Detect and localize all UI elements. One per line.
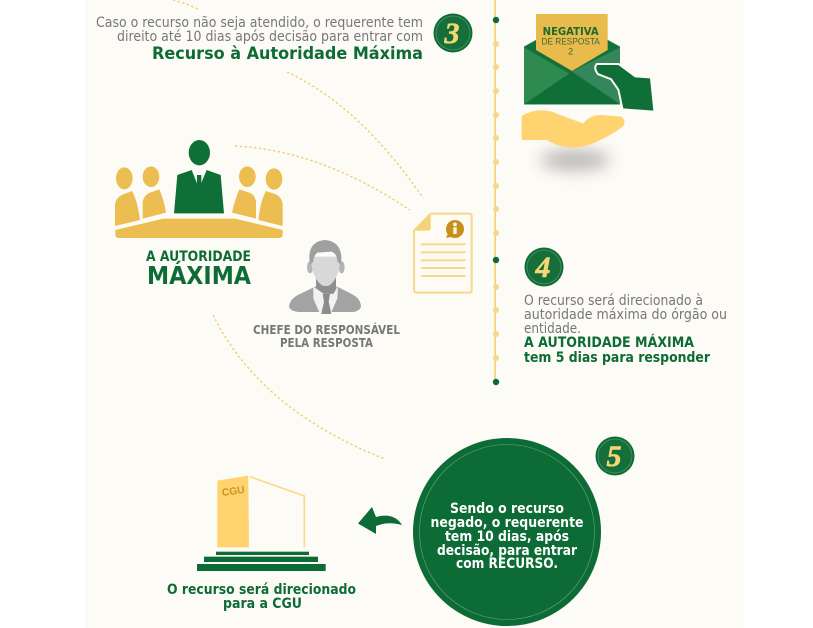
text block: step 4: autoridade máxima do órgão ou — [524, 307, 727, 323]
heading: a autoridade máxima — [146, 249, 252, 290]
dotted connector: authority to step 5 — [213, 315, 385, 459]
icon: document with info — [414, 214, 472, 293]
caption: CGU: O recurso será direcionado — [167, 582, 356, 598]
caption: chefe do responsável — [253, 322, 400, 350]
callout: step 5 circle: negado, o requerente — [430, 515, 584, 531]
callout: step 5 circle: Sendo o recurso — [450, 501, 564, 517]
icon: CGU building — [197, 476, 326, 571]
caption: chefe do responsável: CHEFE DO RESPONSÁVEL — [253, 322, 400, 337]
dotted connector: top fragment — [173, 0, 198, 9]
text block: step 4 — [524, 293, 727, 366]
callout: step 5 circle: com RECURSO. — [456, 556, 558, 572]
illustration: envelope with hands: 2 — [568, 46, 573, 56]
text block: step 4: O recurso será direcionado à — [524, 293, 703, 309]
arrow: to CGU — [358, 507, 402, 534]
heading: a autoridade máxima: A AUTORIDADE — [146, 249, 251, 265]
badge: step 5: 5 — [606, 440, 622, 473]
text block: step 4: A AUTORIDADE MÁXIMA — [524, 333, 694, 351]
callout: step 5 circle — [413, 438, 601, 626]
illustration: envelope with hands: DE RESPOSTA — [541, 37, 600, 47]
text block: step 3 — [96, 15, 423, 64]
icon: gray person — [289, 240, 361, 314]
caption: chefe do responsável: PELA RESPOSTA — [280, 336, 374, 350]
illustration: envelope with hands — [522, 14, 653, 170]
badge: step 4: 4 — [534, 251, 550, 284]
callout: step 5 circle: decisão, para entrar — [437, 543, 578, 559]
badge: step 4 — [524, 248, 564, 286]
badge: step 3: 3 — [444, 17, 460, 50]
badge: step 3 — [434, 14, 472, 52]
text block: step 4: entidade. — [524, 321, 581, 337]
icon: CGU building: CGU — [221, 485, 245, 499]
illustration: envelope with hands: NEGATIVA — [543, 26, 599, 38]
dotted connector: authority to document — [235, 146, 410, 210]
text block: step 3: Recurso à Autoridade Máxima — [152, 44, 423, 64]
text block: step 3: Caso o recurso não seja atendido, o requerente tem — [96, 15, 423, 31]
dotted connector: step 3 to document — [287, 72, 423, 198]
callout: step 5 circle: tem 10 dias, após — [445, 529, 569, 545]
badge: step 5 — [596, 436, 634, 476]
text block: step 3: direito até 10 dias após decisão para entrar com — [117, 29, 423, 45]
illustration: authority meeting — [115, 140, 283, 238]
timeline — [493, 0, 499, 385]
heading: a autoridade máxima: MÁXIMA — [147, 261, 252, 290]
text block: step 4: tem 5 dias para responder — [524, 350, 711, 366]
caption: CGU: para a CGU — [223, 596, 302, 612]
caption: CGU — [167, 582, 356, 612]
